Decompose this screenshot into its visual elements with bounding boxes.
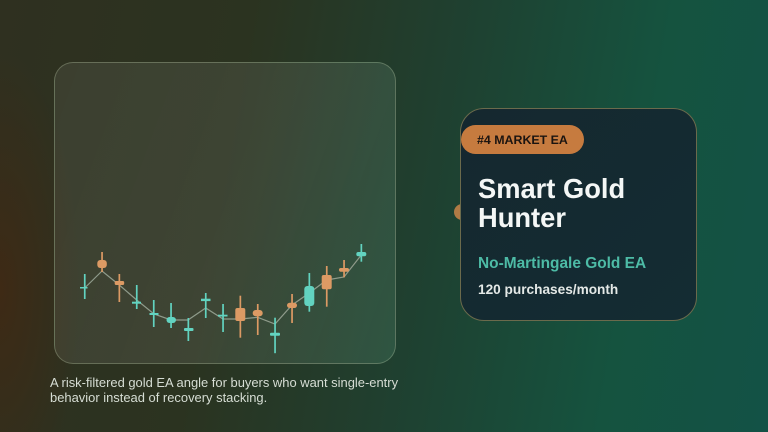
connector dot [454, 204, 470, 220]
badge: rank: #4 MARKET EA [477, 133, 568, 147]
heading: product name [478, 173, 625, 233]
panel: chart card [54, 62, 396, 364]
stat: purchases: 120 purchases/month [478, 282, 618, 297]
caption text: behavior instead of recovery stacking. [50, 390, 267, 405]
badge: rank [461, 125, 584, 154]
caption text: A risk-filtered gold EA angle for buyers who want single-entry [50, 375, 398, 390]
panel: product card [460, 108, 697, 321]
heading: product name: Smart Gold [478, 173, 625, 204]
caption text [50, 375, 398, 405]
subtitle: No-Martingale Gold EA [478, 255, 646, 272]
heading: product name: Hunter [478, 202, 566, 233]
